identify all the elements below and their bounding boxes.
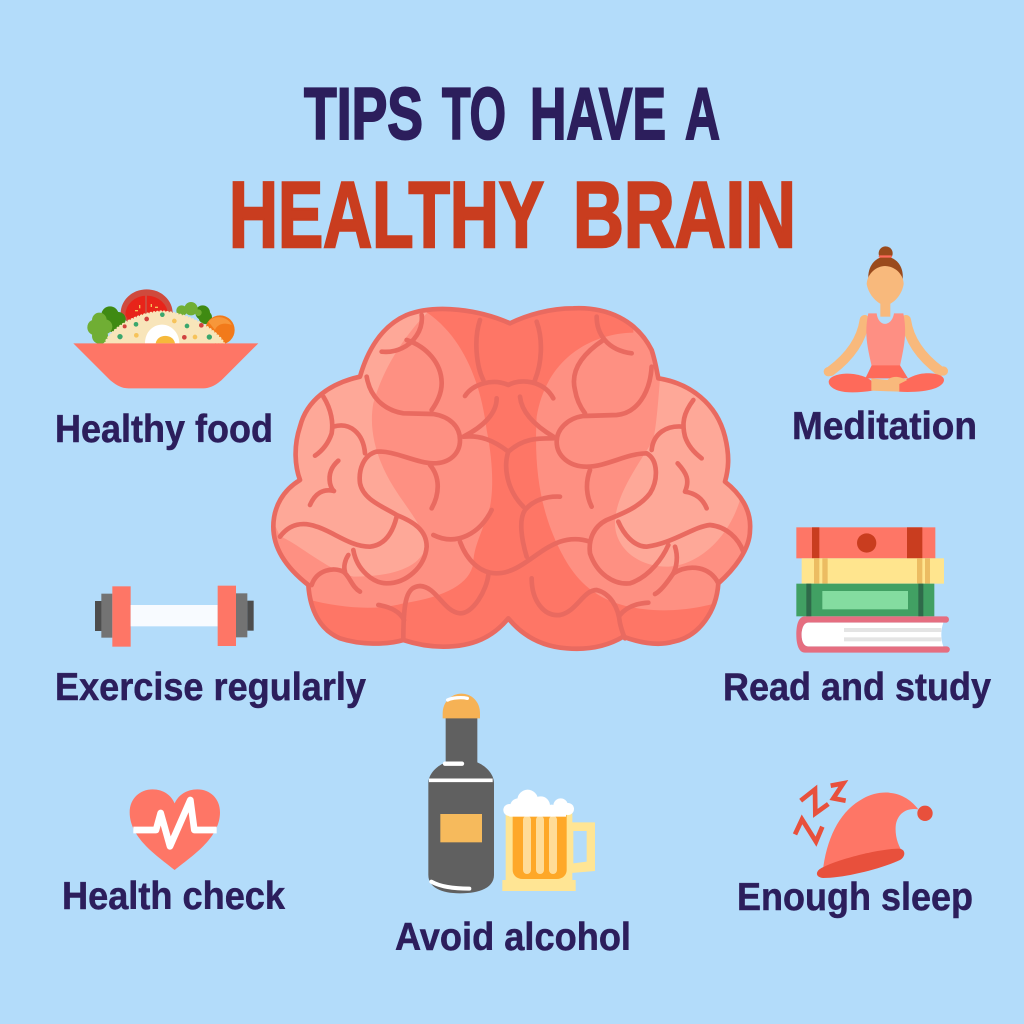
label: enough sleep: Enough sleep [737,876,973,919]
label: health check: Health check [62,875,285,918]
brain illustration [260,290,760,660]
label: meditation: Meditation [792,405,977,448]
title: HAVE [530,74,666,155]
title [229,74,796,267]
title: TO [442,74,506,155]
icon: stack of books [796,527,950,653]
label: read and study: Read and study [723,666,991,709]
icon: sleep cap with Z letters [795,783,933,878]
label: avoid alcohol: Avoid alcohol [395,916,631,959]
icon: dumbbell [95,586,254,647]
title: TIPS [304,74,423,155]
label: healthy food: Healthy food [55,408,273,451]
title: A [685,74,720,155]
title: HEALTHY [229,162,544,267]
icon: meditation figure [824,246,948,392]
icon: bottle and beer mug [428,694,595,893]
title: BRAIN [573,162,796,267]
label: exercise regularly: Exercise regularly [55,666,366,709]
icon: healthy food bowl [73,289,258,388]
icon: heart with pulse [130,789,220,870]
